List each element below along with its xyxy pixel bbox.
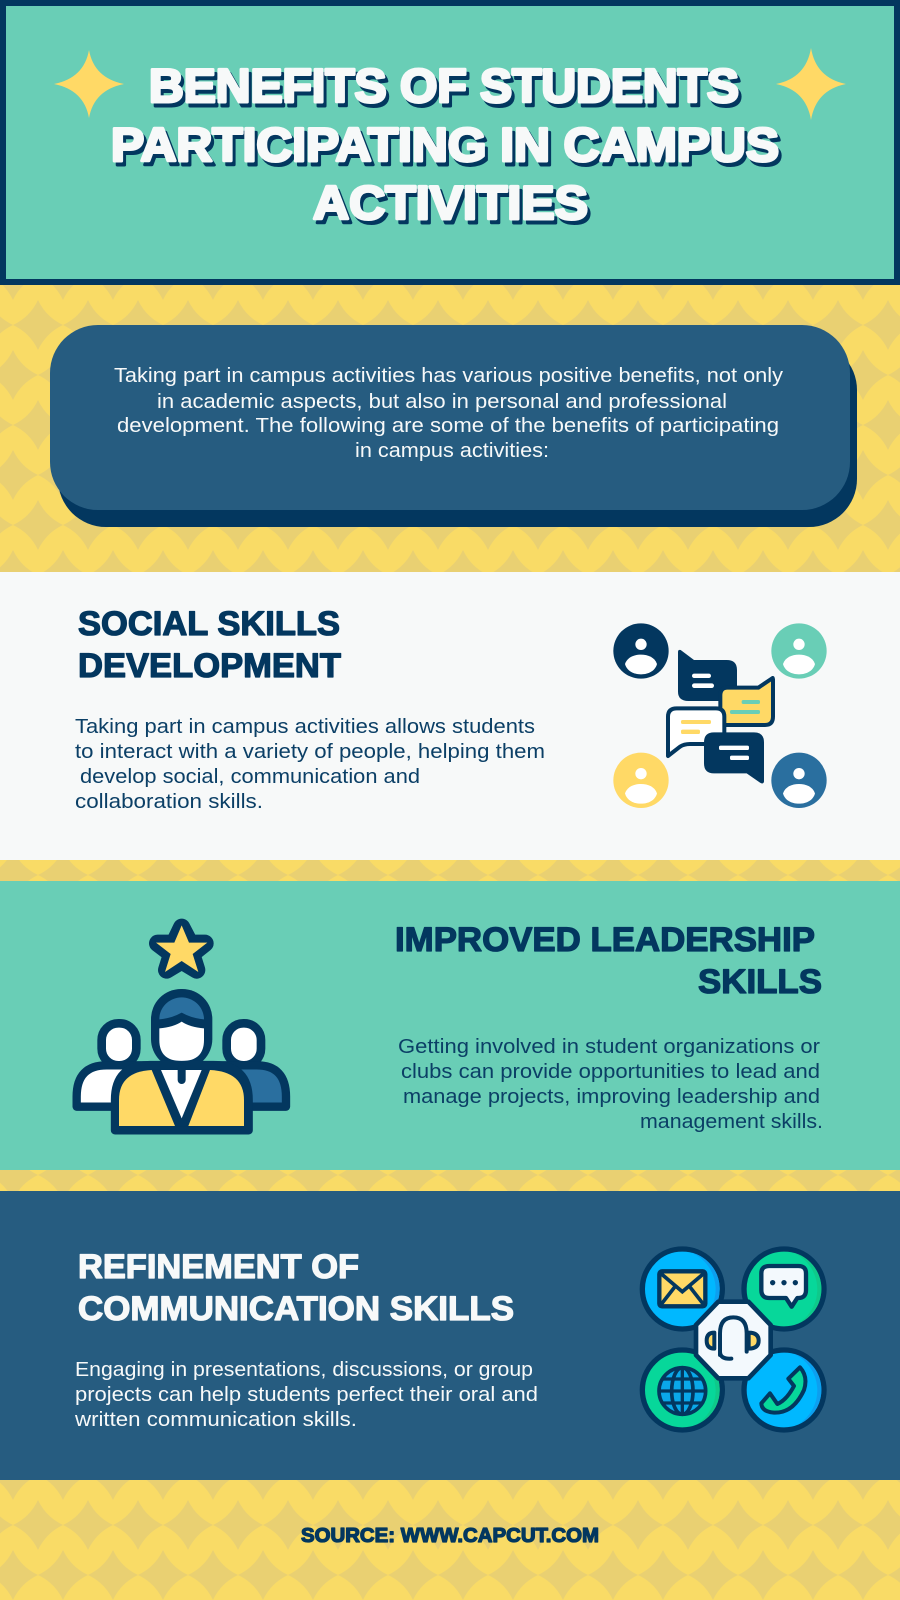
heading: leadership <box>395 921 822 1001</box>
icon: left sparkle <box>54 50 124 118</box>
header banner <box>3 3 897 282</box>
title: BENEFITS OF STUDENTS <box>152 63 742 116</box>
panel: refinement of communication skills <box>0 1191 900 1480</box>
intro text: development. The following are some of the benefits of participating <box>117 414 779 437</box>
icon: right sparkle <box>776 48 846 120</box>
title: PARTICIPATING IN CAMPUS <box>114 122 782 175</box>
heading: social skills: DEVELOPMENT <box>78 647 341 685</box>
panel: improved leadership skills <box>0 881 900 1170</box>
body: leadership: management skills. <box>640 1110 823 1133</box>
intro text <box>114 364 784 462</box>
body: communication <box>74 1358 538 1431</box>
body: social skills: develop social, communication and <box>80 765 420 788</box>
icon: leader with team <box>77 925 286 1130</box>
title: BENEFITS OF STUDENTS <box>149 59 739 112</box>
title: PARTICIPATING IN CAMPUS <box>111 118 779 171</box>
body: leadership <box>398 1035 823 1133</box>
title: ACTIVITIES <box>313 176 588 229</box>
body: communication: written communication skills. <box>74 1408 357 1431</box>
icon: chat and people <box>613 623 827 808</box>
icon: communication channels <box>642 1249 824 1430</box>
heading: social skills: SOCIAL SKILLS <box>78 605 340 643</box>
body: social skills: Taking part in campus activities allows students <box>75 715 535 738</box>
heading: leadership: IMPROVED LEADERSHIP <box>395 921 815 959</box>
body: communication: Engaging in presentations, discussions, or group <box>75 1358 533 1381</box>
source line: SOURCE: WWW.CAPCUT.COM <box>301 1525 599 1547</box>
body: leadership: clubs can provide opportunities to lead and <box>401 1060 820 1083</box>
heading: social skills <box>78 605 341 685</box>
heading: communication: COMMUNICATION SKILLS <box>78 1290 514 1328</box>
heading: leadership: SKILLS <box>698 963 822 1001</box>
body: social skills: to interact with a variety of people, helping them <box>75 740 545 763</box>
heading: communication: REFINEMENT OF <box>78 1248 359 1286</box>
body: social skills <box>75 715 545 813</box>
intro text: in campus activities: <box>355 439 549 462</box>
panel: social skills development <box>0 572 900 860</box>
intro text: Taking part in campus activities has various positive benefits, not only <box>114 364 784 387</box>
title: ACTIVITIES <box>316 180 591 233</box>
intro text: in academic aspects, but also in personal and professional <box>157 390 727 413</box>
body: leadership: Getting involved in student organizations or <box>398 1035 820 1058</box>
body: social skills: collaboration skills. <box>75 790 263 813</box>
heading: communication <box>78 1248 514 1328</box>
body: leadership: manage projects, improving leadership and <box>403 1085 820 1108</box>
title <box>111 59 782 233</box>
panel: intro callout <box>50 325 857 527</box>
body: communication: projects can help students perfect their oral and <box>75 1383 538 1406</box>
